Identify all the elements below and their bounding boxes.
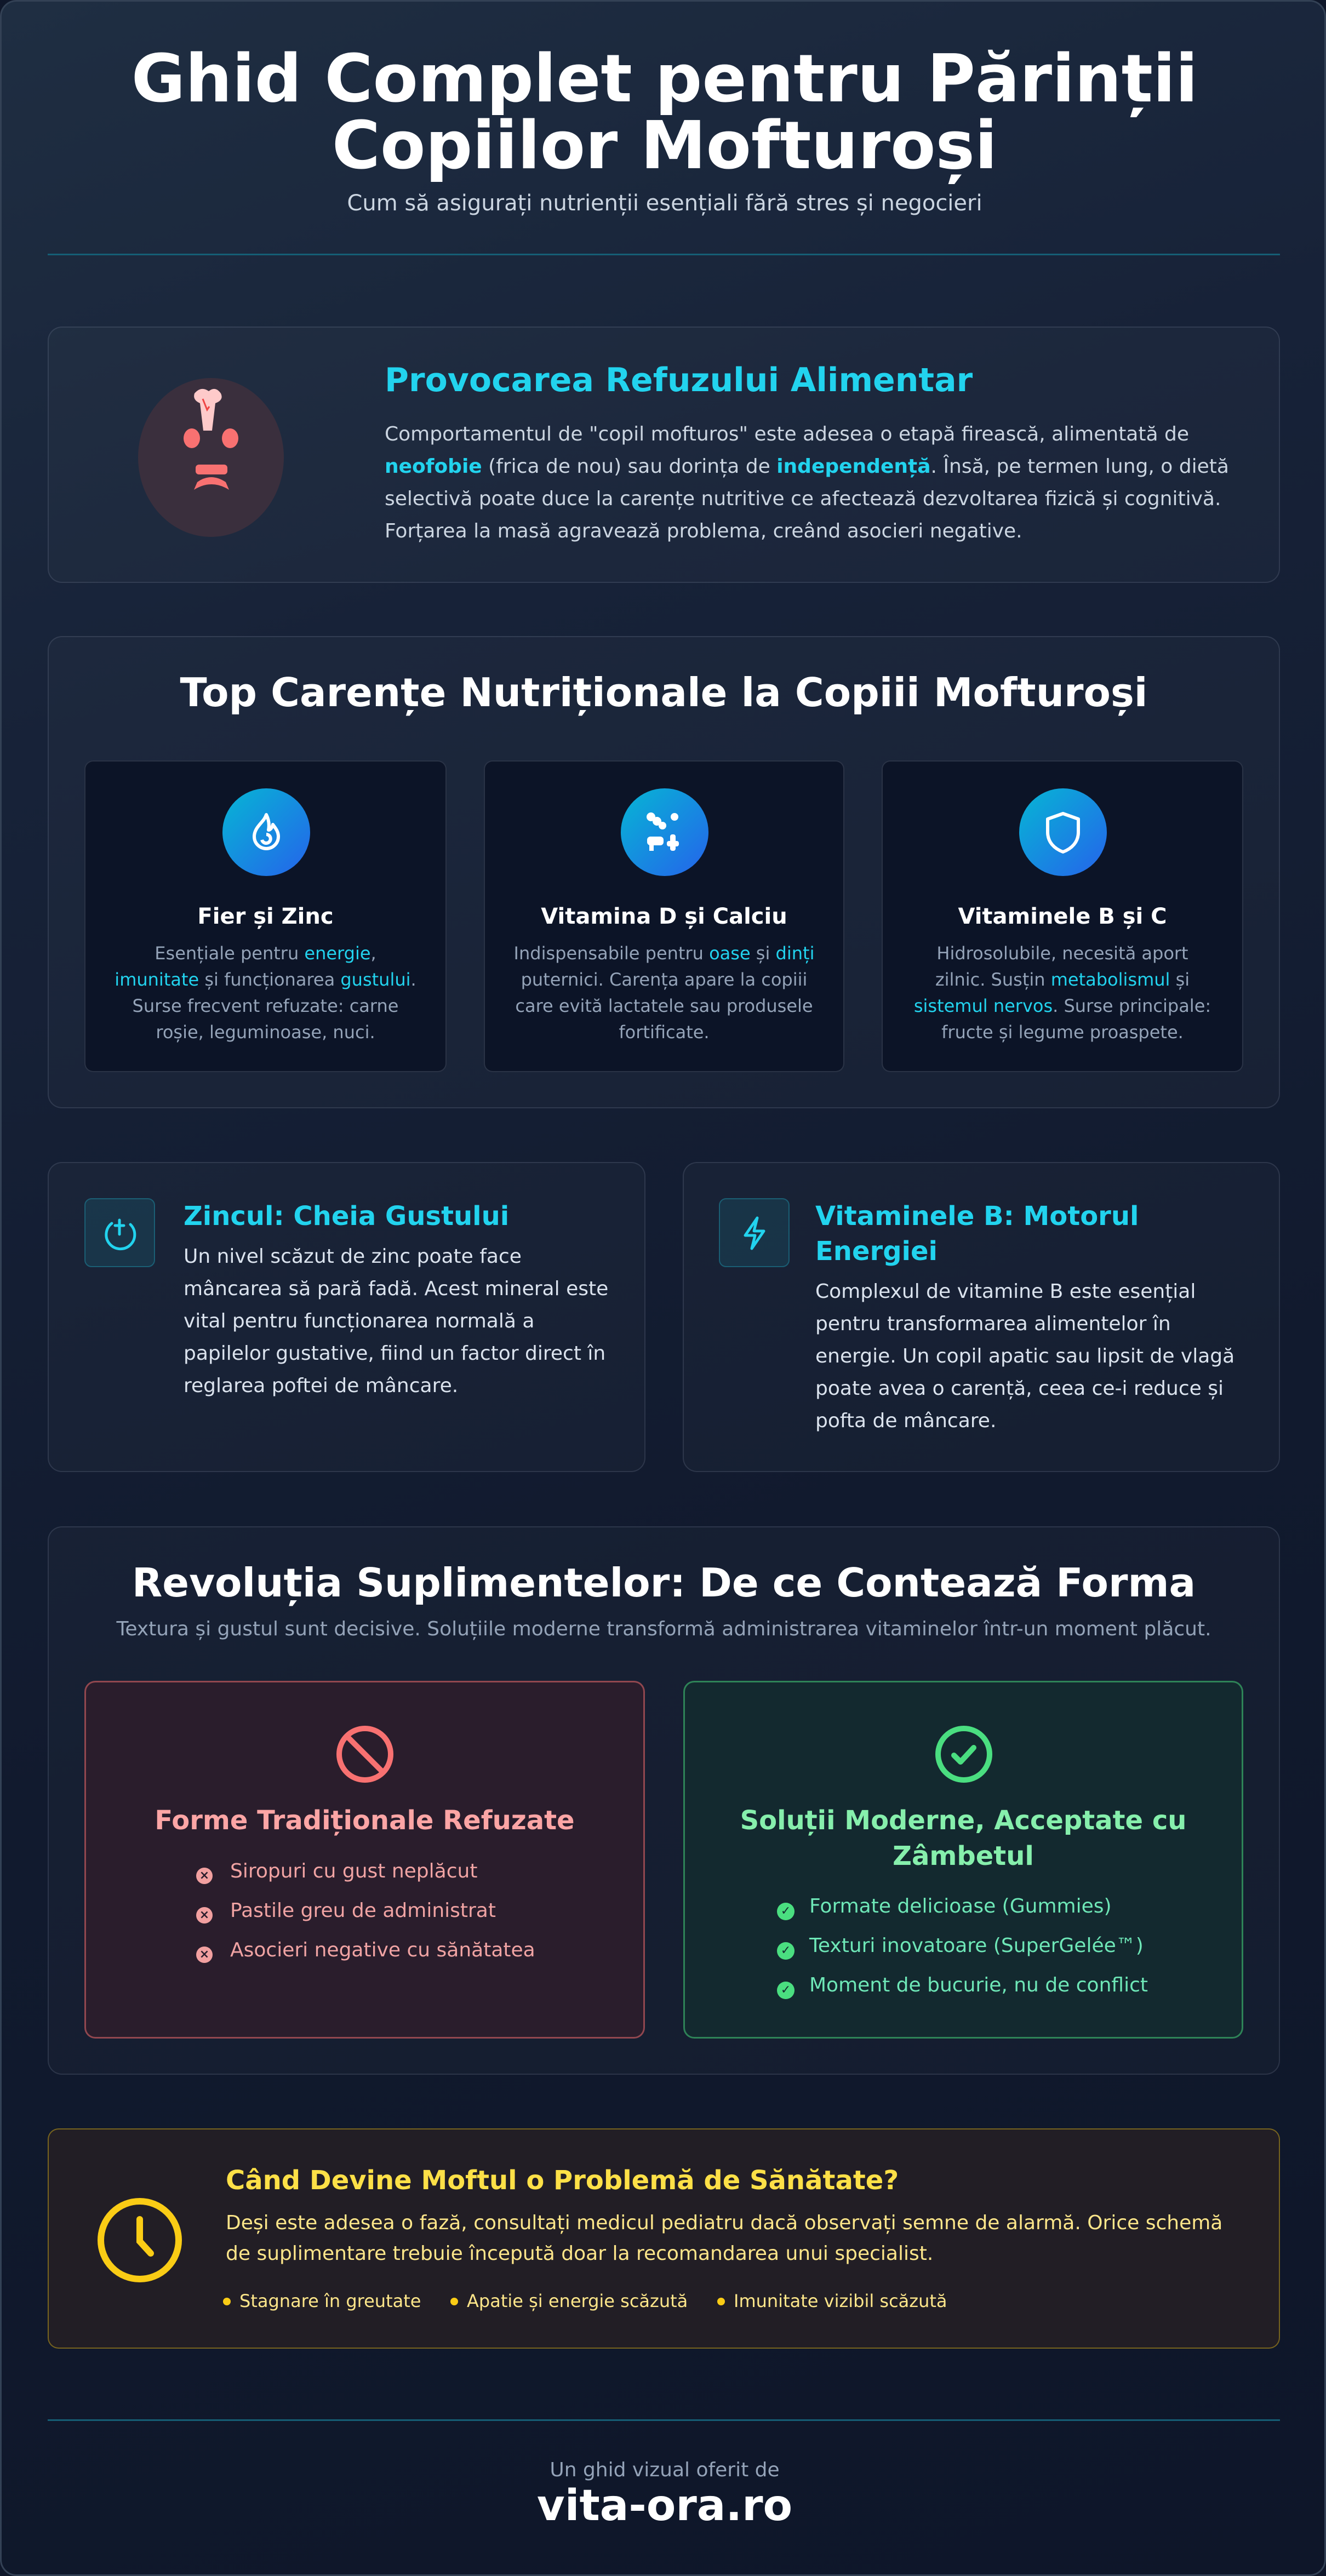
card: traditional forms xyxy=(84,1681,645,2039)
list: Texturi inovatoare (SuperGelée™) xyxy=(809,1934,1144,1957)
icon: forbidden xyxy=(336,1726,393,1783)
description: care evită lactatele sau produsele xyxy=(515,995,813,1016)
text block: mâncarea să pară fadă. Acest mineral este xyxy=(184,1278,608,1300)
title: Copiilor Mofturoși xyxy=(332,108,997,184)
panel: vitamin B xyxy=(683,1162,1280,1472)
list: Asocieri negative cu sănătatea xyxy=(230,1939,535,1961)
icon: bones xyxy=(621,788,708,876)
list: ✓ xyxy=(781,1944,791,1957)
text block: neofobie (frica de nou) sau dorința de independență. Însă, pe termen lung, o dietă xyxy=(385,455,1229,478)
description: imunitate și funcționarea gustului. xyxy=(115,969,416,990)
heading: Revoluția Suplimentelor: De ce Contează Forma xyxy=(132,1560,1196,1606)
text block xyxy=(226,2212,1222,2265)
panel: warning xyxy=(48,2128,1280,2349)
text block: de suplimentare trebuie începută doar la recomandarea unui specialist. xyxy=(226,2242,933,2265)
heading: Provocarea Refuzului Alimentar xyxy=(385,361,973,399)
text block: Deși este adesea o fază, consultați medicul pediatru dacă observați semne de alarmă. Orice schemă xyxy=(226,2212,1222,2234)
description: fortificate. xyxy=(619,1022,710,1043)
text block: pofta de mâncare. xyxy=(815,1410,996,1432)
title: Ghid Complet pentru Părinții xyxy=(132,41,1198,117)
description: Hidrosolubile, necesită aport xyxy=(936,943,1188,964)
subtitle: Textura și gustul sunt decisive. Soluțiile moderne transformă administrarea vitaminelor într-un moment plăcut. xyxy=(116,1618,1211,1640)
text block: energie. Un copil apatic sau lipsit de vlagă xyxy=(815,1345,1234,1367)
text block: selectivă poate duce la carențe nutritive ce afectează dezvoltarea fizică și cognitivă. xyxy=(385,488,1221,510)
panel: zinc xyxy=(48,1162,645,1472)
list: Siropuri cu gust neplăcut xyxy=(230,1860,477,1882)
title xyxy=(132,41,1198,184)
description: sistemul nervos. Surse principale: xyxy=(914,995,1211,1016)
subtitle: Cum să asigurați nutrienții esențiali fără stres și negocieri xyxy=(347,191,982,216)
card: iron zinc xyxy=(84,760,447,1072)
icon: shield xyxy=(1019,788,1107,876)
card: modern solutions xyxy=(683,1681,1243,2039)
list: ✓ xyxy=(781,1904,791,1918)
text block: Comportamentul de "copil mofturos" este adesea o etapă firească, alimentată de xyxy=(385,423,1189,445)
list xyxy=(196,1860,535,1963)
heading: Energiei xyxy=(815,1236,938,1267)
footer xyxy=(537,2459,792,2531)
icon: clock xyxy=(98,2198,182,2282)
icon: check xyxy=(935,1726,992,1783)
heading: Top Carențe Nutriționale la Copiii Mofturoși xyxy=(180,669,1147,715)
list xyxy=(777,1895,1148,1999)
icon: lightning xyxy=(719,1198,790,1267)
panel: supplements revolution xyxy=(48,1526,1280,2075)
warning signs list xyxy=(223,2291,947,2311)
description xyxy=(914,943,1211,1043)
text block: papilelor gustative, fiind un factor direct în xyxy=(184,1342,605,1365)
list: Moment de bucurie, nu de conflict xyxy=(809,1974,1148,1996)
icon: upset face xyxy=(138,378,284,537)
title: Fier și Zinc xyxy=(197,904,334,929)
text block xyxy=(184,1245,608,1397)
title: Zâmbetul xyxy=(893,1841,1034,1871)
title xyxy=(740,1805,1186,1871)
title: Soluții Moderne, Acceptate cu xyxy=(740,1805,1186,1836)
warning signs list: Apatie și energie scăzută xyxy=(467,2291,688,2311)
panel: food refusal challenge xyxy=(48,327,1280,583)
title: Vitaminele B și C xyxy=(958,904,1167,929)
description: Esențiale pentru energie, xyxy=(155,943,376,964)
footer: vita-ora.ro xyxy=(537,2481,792,2531)
footer: Un ghid vizual oferit de xyxy=(550,2459,780,2481)
description: fructe și legume proaspete. xyxy=(941,1022,1184,1043)
description xyxy=(514,943,814,1043)
card: vitamins B C xyxy=(882,760,1243,1072)
list: Formate delicioase (Gummies) xyxy=(809,1895,1112,1917)
text block: Complexul de vitamine B este esențial xyxy=(815,1280,1196,1303)
list: Pastile greu de administrat xyxy=(230,1899,496,1922)
heading: Când Devine Moftul o Problemă de Sănătate? xyxy=(226,2165,899,2196)
text block: vital pentru funcționarea normală a xyxy=(184,1310,534,1332)
description xyxy=(115,943,416,1043)
warning signs list: Imunitate vizibil scăzută xyxy=(734,2291,947,2311)
text block: pentru transformarea alimentelor în xyxy=(815,1313,1171,1335)
description: Indispensabile pentru oase și dinți xyxy=(514,943,814,964)
heading: Zincul: Cheia Gustului xyxy=(184,1201,509,1232)
warning signs list: Stagnare în greutate xyxy=(239,2291,421,2311)
text block xyxy=(815,1280,1234,1432)
heading xyxy=(815,1201,1139,1267)
text block xyxy=(385,423,1229,542)
description: Surse frecvent refuzate: carne xyxy=(133,995,398,1016)
text block: Un nivel scăzut de zinc poate face xyxy=(184,1245,522,1268)
text block: Forțarea la masă agravează problema, creând asocieri negative. xyxy=(385,520,1022,542)
list: × xyxy=(199,1948,209,1961)
icon: taste xyxy=(84,1198,155,1267)
list: × xyxy=(199,1908,209,1922)
heading: Vitaminele B: Motorul xyxy=(815,1201,1139,1232)
text block: reglarea poftei de mâncare. xyxy=(184,1375,458,1397)
panel: top deficiencies xyxy=(48,636,1280,1108)
card: vitamin D calcium xyxy=(484,760,844,1072)
list: × xyxy=(199,1869,209,1882)
list: ✓ xyxy=(781,1983,791,1997)
title: Vitamina D și Calciu xyxy=(541,904,787,929)
title: Forme Tradiționale Refuzate xyxy=(155,1805,575,1836)
text block: poate avea o carență, ceea ce-i reduce și xyxy=(815,1377,1224,1400)
icon: flame xyxy=(222,788,310,876)
description: zilnic. Susțin metabolismul și xyxy=(935,969,1190,990)
description: puternici. Carența apare la copiii xyxy=(521,969,807,990)
description: roșie, leguminoase, nuci. xyxy=(156,1022,375,1043)
